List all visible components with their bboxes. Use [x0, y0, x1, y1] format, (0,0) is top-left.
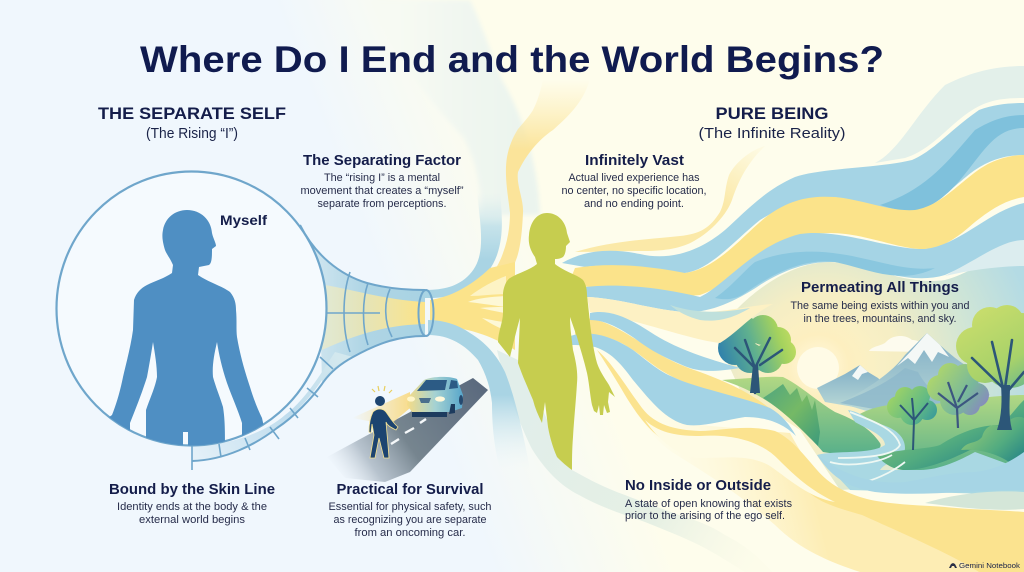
text: practical for survival: Essential for physical safety, such: [328, 501, 492, 513]
text: infinitely vast: Infinitely Vast: [585, 152, 684, 169]
text: permeating all things: [790, 279, 970, 325]
band: lower blue: [817, 452, 1024, 494]
tube lower strip: [192, 352, 353, 461]
road: [327, 378, 488, 482]
hill middle: [858, 395, 1024, 470]
text: the separating factor: The “rising I” is a mental: [324, 172, 440, 184]
band: blue two: [590, 312, 740, 371]
band: pale wide yellow sweep: [597, 350, 985, 572]
watermark: Gemini Notebook: [959, 561, 1020, 570]
cloud: [869, 336, 927, 352]
forest slope: [763, 384, 820, 446]
headlight beam: [352, 392, 410, 425]
text: no inside or outside: No Inside or Outside: [625, 477, 771, 494]
tree: small middle: [887, 386, 937, 450]
text: the separating factor: movement that creates a “myself”: [300, 185, 464, 197]
heading: pure being: [698, 104, 846, 142]
band: cream edge: [925, 491, 1024, 510]
bushes: [961, 417, 1024, 475]
river highlights: [830, 412, 905, 482]
title: Where Do I End and the World Begins?: [140, 39, 884, 80]
circle fill: [56, 172, 326, 446]
leader line: [191, 445, 193, 470]
band: darker blue ribbon: [880, 115, 1024, 211]
road scene: [327, 377, 488, 482]
blue stream rising from funnel: [423, 190, 502, 298]
foreground hill: [877, 400, 1024, 470]
tree: left: [718, 315, 796, 393]
band: upper blue wave: [562, 103, 1024, 273]
alert marks: [372, 386, 392, 393]
text: infinitely vast: Actual lived experience has: [568, 172, 700, 184]
text: practical for survival: Practical for Survival: [336, 481, 484, 498]
mountain: shadow ridge: [840, 368, 950, 410]
band: cream: [587, 297, 773, 343]
heading: the separate self: (The Rising “I”): [146, 125, 238, 142]
band: dark blue accent: [715, 252, 935, 299]
yellow stream right of the figure: [575, 146, 765, 252]
text: bound by the skin line: Bound by the Skin Line: [109, 481, 275, 498]
text: no inside or outside: A state of open knowing that exists: [625, 498, 792, 510]
text: practical for survival: as recognizing you are separate: [334, 514, 486, 526]
text: permeating all things: in the trees, mountains, and sky.: [804, 313, 956, 325]
inner yellow core: [322, 285, 425, 350]
sun: [797, 347, 839, 389]
band: thin teal ribbon: [670, 305, 750, 321]
heading: pure being: (The Infinite Reality): [698, 125, 846, 142]
band: cream streak in yellow: [645, 420, 835, 502]
band: main yellow sweep: [597, 350, 1024, 572]
text: bound by the skin line: Identity ends at the body & the: [117, 501, 267, 513]
pale band under the figure: [497, 350, 772, 572]
road dashes: [391, 419, 426, 444]
text: the separating factor: [300, 152, 464, 210]
tube body: [300, 225, 425, 383]
heading: the separate self: [98, 104, 286, 142]
text: infinitely vast: no center, no specific location,: [562, 185, 706, 197]
text: no inside or outside: prior to the arising of the ego self.: [625, 510, 785, 522]
text: infinitely vast: and no ending point.: [584, 198, 684, 210]
hill left: [722, 377, 881, 454]
tube outline: [192, 225, 425, 461]
sun glow: [756, 304, 880, 428]
text: the separating factor: The Separating Factor: [303, 152, 461, 169]
cloud upper right: [945, 238, 1024, 276]
text: permeating all things: The same being exists within you and: [790, 300, 970, 312]
band: blue three: [568, 334, 796, 436]
band: middle yellow wave: [568, 155, 1024, 295]
blue figure: [105, 210, 268, 450]
landscape: [715, 238, 1024, 495]
heading: pure being: PURE BEING: [716, 104, 828, 123]
yellow-green figure: [498, 213, 615, 470]
text: no inside or outside: [625, 477, 792, 522]
landscape sky: [715, 238, 1024, 490]
label: myself: Myself: [220, 212, 267, 228]
lower blue stream: [428, 320, 530, 470]
text: permeating all things: Permeating All Things: [801, 279, 959, 296]
pale flowing background washes: [370, 0, 1024, 215]
text: bound by the skin line: [109, 481, 275, 526]
funnel tube: [192, 225, 434, 470]
separate self circle: [56, 172, 326, 450]
car: [407, 377, 463, 417]
text: practical for survival: from an oncoming car.: [354, 527, 466, 539]
text: the separating factor: separate from perceptions.: [318, 198, 446, 210]
river: [817, 410, 1024, 495]
pedestrian: [369, 396, 398, 458]
yellow fan from funnel to figure: [430, 262, 515, 350]
mountain: far left: [817, 365, 895, 408]
text: bound by the skin line: external world begins: [139, 514, 246, 526]
mountain: snow: [852, 333, 949, 380]
text: infinitely vast: [562, 152, 706, 210]
band: lower blue wave: [585, 203, 1024, 312]
tree: purple tinted: [927, 363, 989, 428]
band: yellow two: [575, 318, 793, 431]
heading: the separate self: THE SEPARATE SELF: [98, 104, 286, 123]
text: practical for survival: [328, 481, 492, 539]
tube ring: [418, 290, 434, 336]
flowing bands: pure being: [562, 103, 1024, 572]
tube ribs: [219, 272, 392, 457]
mountain: main peak: [840, 333, 990, 412]
tree: large right: [956, 305, 1024, 430]
yellow stream above the figure: [488, 78, 590, 282]
